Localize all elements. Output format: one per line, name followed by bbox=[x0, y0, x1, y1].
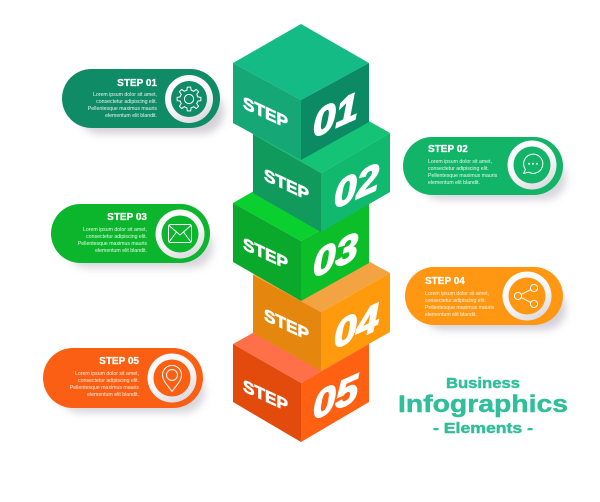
panel: step 04 pill bbox=[405, 267, 566, 330]
panel: step 05 pill: STEP 05 bbox=[99, 356, 139, 367]
panel: step 03 pill: Pellentesque maximus mauris bbox=[78, 241, 147, 247]
panel: step 02 pill: STEP 02 bbox=[428, 144, 468, 155]
panel: step 02 pill: Lorem ipsum dolor sit amet, bbox=[428, 159, 492, 165]
panel: step 01 pill bbox=[62, 69, 224, 134]
cube: step 03 bbox=[233, 164, 369, 301]
panel: step 03 pill: Lorem ipsum dolor sit amet, bbox=[83, 227, 147, 233]
icon: location pin bbox=[162, 366, 182, 392]
panel: step 02 pill: elementum elit blandit. bbox=[428, 180, 480, 186]
panel: step 03 pill: consectetur adipiscing elit. bbox=[86, 234, 147, 240]
panel: step 03 pill: STEP 03 bbox=[107, 212, 147, 223]
panel: step 05 pill: consectetur adipiscing elit. bbox=[78, 378, 139, 384]
cube: step 04: 04 bbox=[334, 295, 379, 358]
panel: step 03 pill bbox=[51, 204, 213, 268]
panel: step 02 pill: Pellentesque maximus mauris bbox=[428, 173, 498, 179]
title: - Elements - bbox=[433, 421, 533, 437]
cube: step 02 bbox=[253, 94, 390, 232]
cube: step 03: STEP bbox=[243, 234, 288, 274]
panel: step 01 pill: consectetur adipiscing elit. bbox=[96, 99, 157, 105]
icon: envelope bbox=[168, 224, 192, 242]
panel: step 01 pill: Lorem ipsum dolor sit amet, bbox=[93, 92, 157, 98]
cube: step 04: STEP bbox=[264, 305, 309, 345]
cube: step 02: STEP bbox=[264, 165, 309, 205]
panel: step 05 pill: Pellentesque maximus mauris bbox=[70, 385, 139, 391]
panel: step 04 pill: STEP 04 bbox=[425, 276, 465, 287]
panel: step 04 pill: consectetur adipiscing elit. bbox=[425, 298, 486, 304]
panel: step 05 pill bbox=[43, 348, 205, 413]
title: Infographics bbox=[398, 391, 568, 418]
cube: step 05 bbox=[233, 306, 369, 442]
panel: step 01 pill: STEP 01 bbox=[117, 78, 157, 89]
panel: step 01 pill: Pellentesque maximus mauris bbox=[88, 106, 157, 112]
panel: step 03 pill: elementum elit blandit. bbox=[95, 248, 147, 254]
panel: step 01 pill: elementum elit blandit. bbox=[105, 113, 157, 119]
panel: step 02 pill bbox=[403, 137, 566, 200]
panel: step 04 pill: elementum elit blandit. bbox=[425, 312, 477, 318]
cube: step 05: 05 bbox=[313, 366, 359, 429]
title bbox=[398, 376, 568, 437]
panel: step 05 pill: elementum elit blandit. bbox=[87, 392, 139, 398]
panel: step 05 pill: Lorem ipsum dolor sit amet, bbox=[75, 371, 139, 377]
cube: step 01 bbox=[233, 24, 369, 160]
cube: step 05: STEP bbox=[243, 376, 288, 416]
panel: step 04 pill: Pellentesque maximus mauris bbox=[425, 305, 495, 311]
cube: step 04 bbox=[253, 235, 390, 371]
panel: step 04 pill: Lorem ipsum dolor sit amet, bbox=[425, 291, 489, 297]
cube: step 01: 01 bbox=[313, 84, 358, 147]
title: Business bbox=[446, 376, 520, 392]
cube: step 01: STEP bbox=[243, 93, 288, 133]
icon: speech bubble bbox=[524, 154, 543, 174]
icon: gear bbox=[177, 87, 201, 111]
panel: step 02 pill: consectetur adipiscing elit. bbox=[428, 166, 489, 172]
cube: step 02: 02 bbox=[334, 155, 379, 218]
cube: step 03: 03 bbox=[313, 224, 358, 287]
icon: share bbox=[514, 284, 538, 308]
